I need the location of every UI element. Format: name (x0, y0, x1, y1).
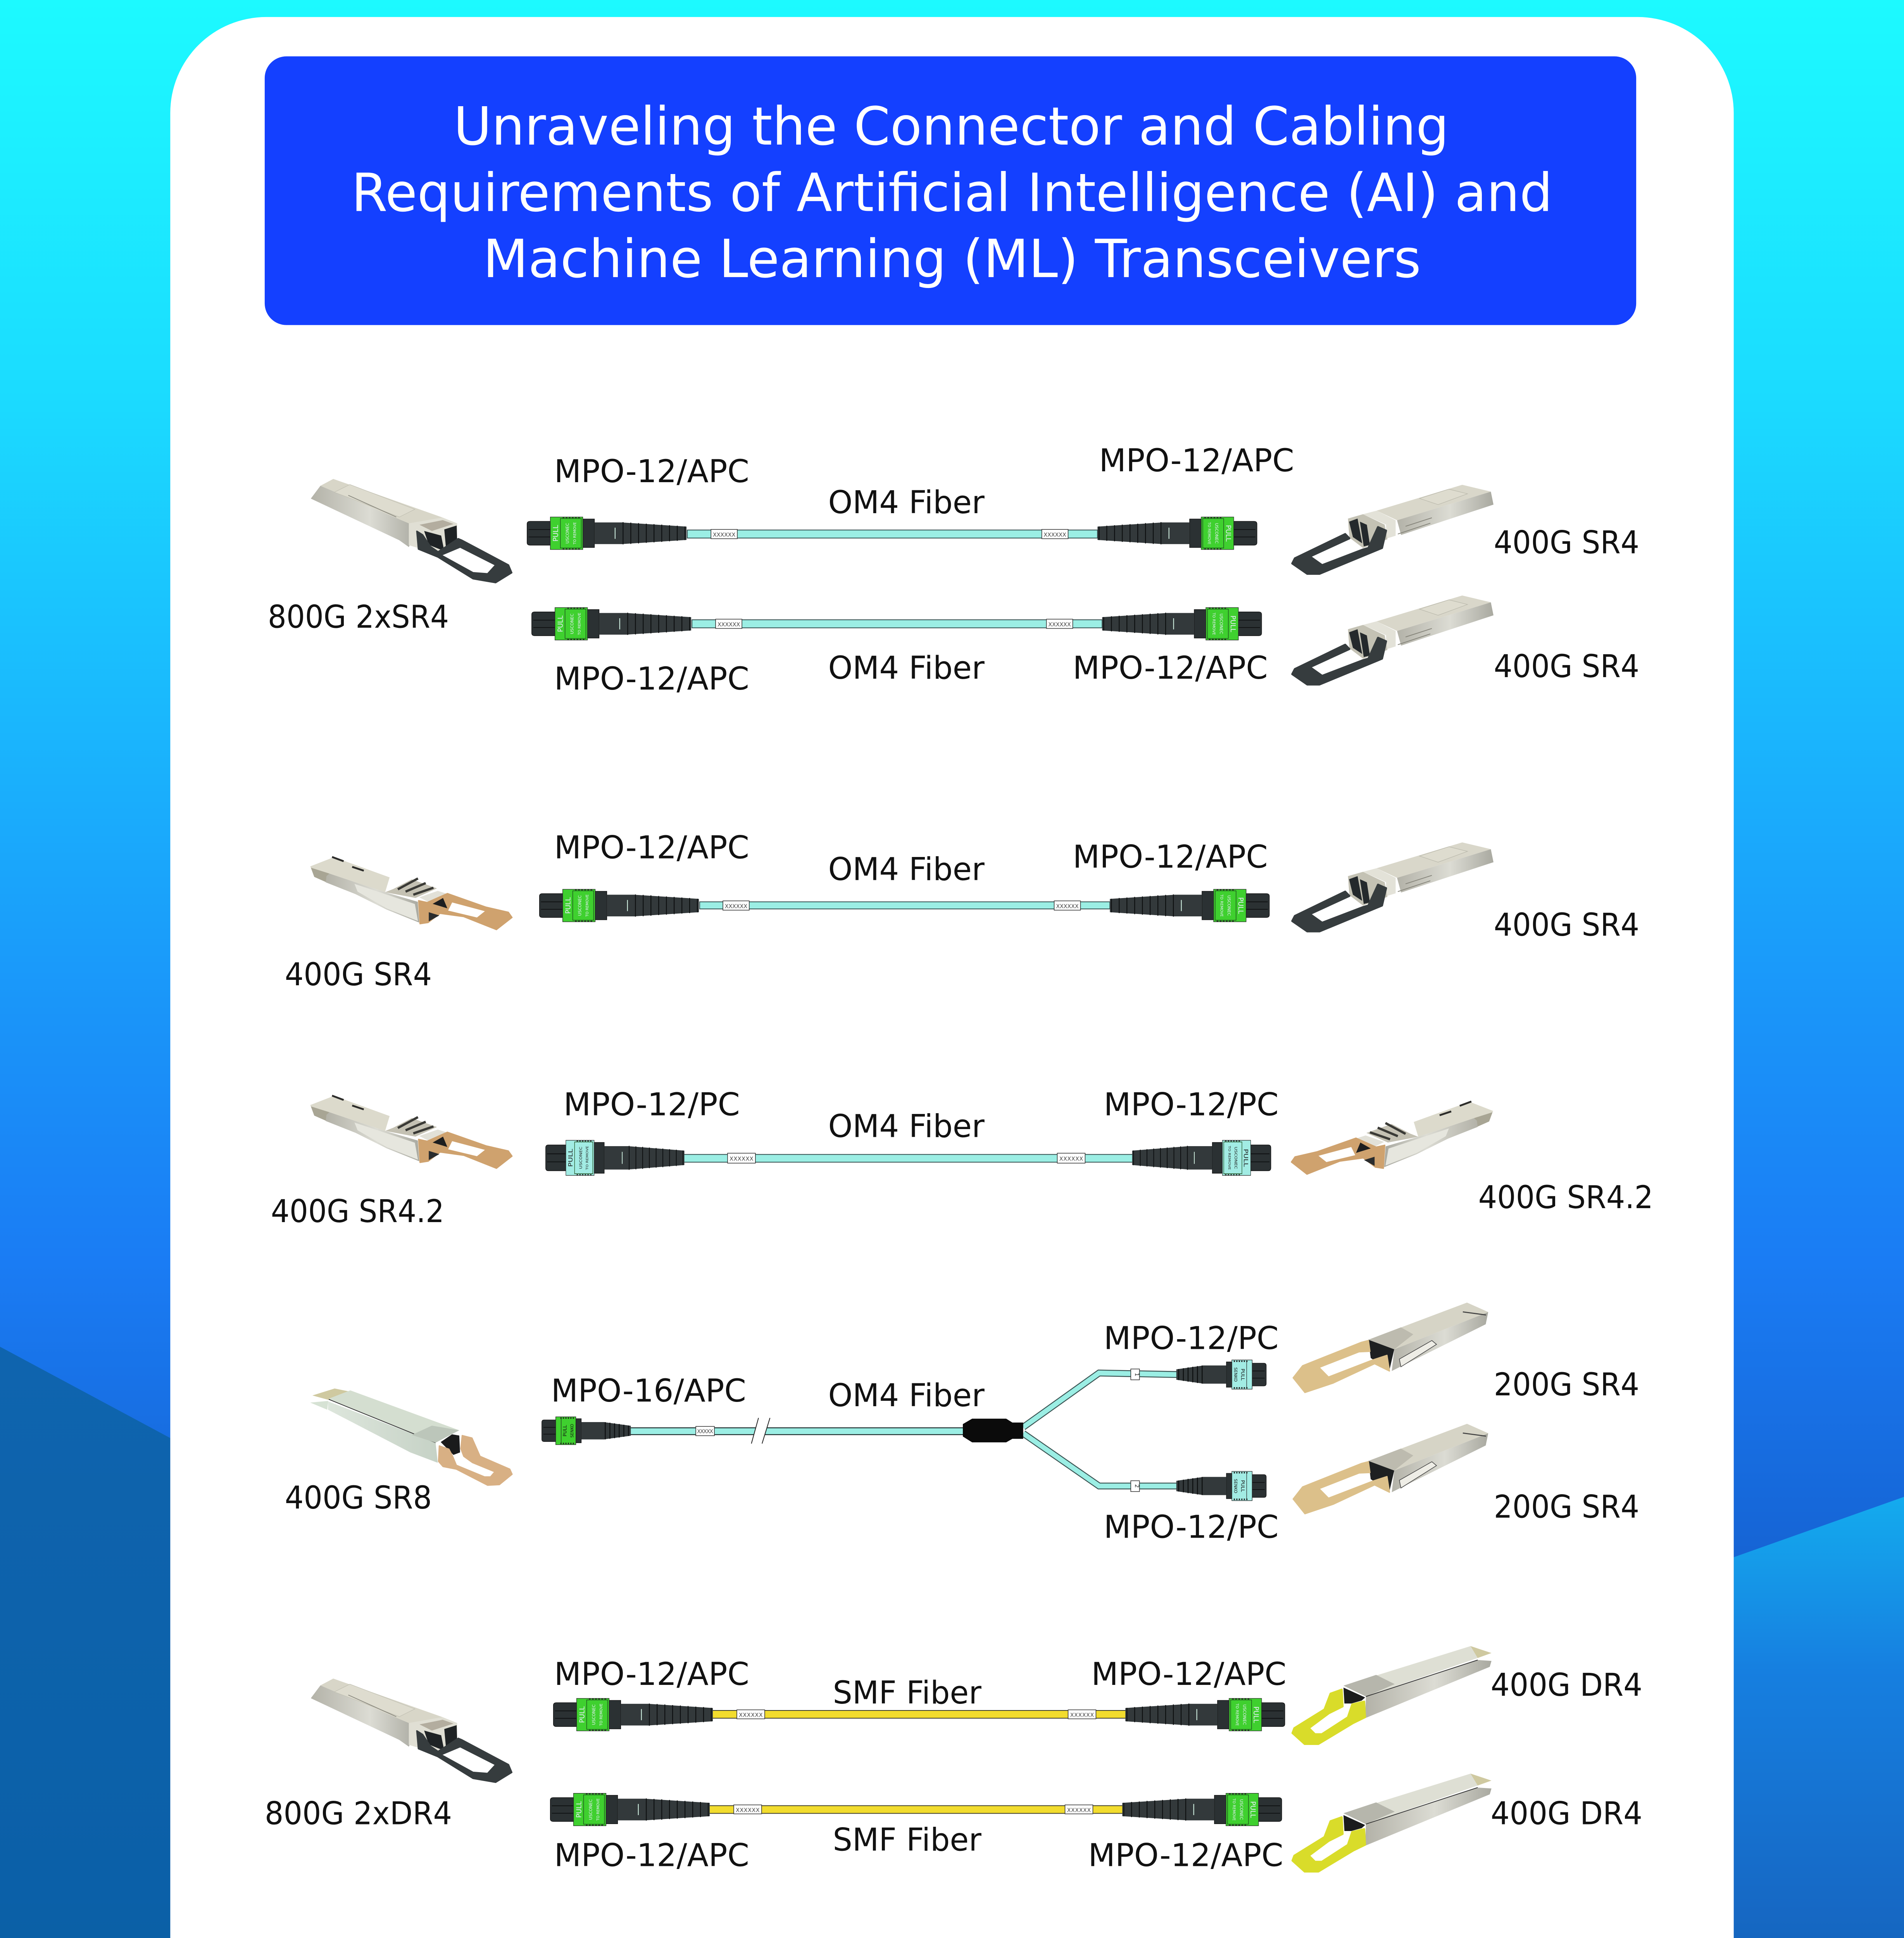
cable: upper OM4: XXXXXX (713, 532, 735, 538)
cable: lower branch (1023, 1433, 1178, 1486)
cable: OM4: XXXXXX (1056, 903, 1079, 910)
cable: lower SMF (709, 1805, 1124, 1814)
transceiver: 800G 2xSR4 (311, 479, 512, 583)
transceiver: right 400G SR4.2 (1291, 1102, 1493, 1174)
title: Unraveling the Connector and Cabling (454, 96, 1449, 157)
connector: left upper MPO-12/APC (554, 1698, 713, 1731)
connector: left MPO-12/PC (546, 1140, 685, 1176)
transceiver: upper 200G SR4 (1293, 1303, 1488, 1393)
connector: MPO-16/APC (542, 1417, 631, 1445)
label: upper 200G SR4: 200G SR4 (1494, 1366, 1639, 1403)
breakout splitter (963, 1419, 1023, 1442)
label: lower left connector: MPO-12/APC (554, 1837, 749, 1874)
transceiver: 800G 2xDR4 (311, 1679, 512, 1782)
label: upper fiber: SMF Fiber (833, 1674, 981, 1711)
label: left 400G SR4.2: 400G SR4.2 (271, 1193, 444, 1230)
title: Machine Learning (ML) Transceivers (483, 229, 1421, 290)
transceiver: left 400G SR4.2 (310, 1096, 512, 1168)
label: lower right connector: MPO-12/APC (1088, 1837, 1283, 1874)
label: left connector: MPO-12/PC (564, 1086, 740, 1123)
label: fiber: OM4 Fiber (828, 1377, 985, 1414)
label: upper 400G SR4: 400G SR4 (1494, 524, 1639, 561)
panel: title banner (265, 56, 1636, 325)
connector: right lower MPO-12/APC (1122, 1793, 1282, 1826)
label: fiber: OM4 Fiber (828, 851, 985, 888)
label: upper right connector: MPO-12/APC (1091, 1656, 1287, 1693)
panel: 400G SR8 breakout to two 200G SR4 (285, 1303, 1639, 1546)
cable: OM4 trunk (630, 1426, 964, 1436)
connector: left upper MPO-12/APC (527, 517, 686, 550)
label: left 400G SR4: 400G SR4 (285, 956, 432, 993)
label: upper right connector: MPO-12/APC (1099, 442, 1294, 479)
cable: lower OM4: XXXXXX (717, 622, 740, 628)
connector: upper MPO-12/PC (1176, 1360, 1266, 1389)
connector: left MPO-12/APC (540, 889, 699, 922)
cable: upper SMF: XXXXXX (1070, 1712, 1094, 1719)
label: fiber: OM4 Fiber (828, 1108, 985, 1145)
title: Requirements of Artificial Intelligence (AI) and (352, 162, 1552, 224)
transceiver: lower 400G SR4 (1292, 595, 1494, 685)
cable tag 1: 1 (1133, 1373, 1140, 1376)
background: lower right facet (1734, 1497, 1904, 1938)
label: right connector: MPO-12/PC (1104, 1086, 1279, 1123)
connector: right upper MPO-12/APC (1125, 1698, 1285, 1731)
label: 800G 2xSR4: 800G 2xSR4 (268, 598, 449, 635)
cable: lower SMF: XXXXXX (736, 1807, 760, 1814)
cable break mark (751, 1418, 770, 1443)
label: upper left connector: MPO-12/APC (554, 1656, 749, 1693)
label: lower 200G SR4: 200G SR4 (1494, 1489, 1639, 1526)
cable tag 1 (1131, 1369, 1140, 1380)
panel: 400G SR4 to 400G SR4 (285, 829, 1639, 993)
connector: right lower MPO-12/APC (1102, 607, 1262, 640)
label: right 400G SR4: 400G SR4 (1494, 907, 1639, 943)
transceiver: left 400G SR4 (310, 857, 512, 930)
transceiver: lower 400G DR4 (1292, 1774, 1492, 1872)
title (352, 96, 1552, 290)
cable: OM4: XXXXXX (1059, 1156, 1083, 1162)
cable tag 2: 2 (1133, 1484, 1140, 1488)
label: lower fiber: OM4 Fiber (828, 650, 985, 686)
background: lower left facet (0, 1347, 170, 1938)
cable: lower OM4: XXXXXX (1048, 622, 1071, 628)
connector: left lower MPO-12/APC (532, 607, 691, 640)
label: upper left connector: MPO-12/APC (554, 453, 749, 490)
label: right connector: MPO-12/APC (1073, 838, 1268, 875)
cable: OM4 (700, 901, 1110, 910)
transceiver: upper 400G DR4 (1292, 1646, 1492, 1744)
label: lower 400G SR4: 400G SR4 (1494, 648, 1639, 685)
transceiver: upper 400G SR4 (1292, 485, 1494, 574)
label: left connector: MPO-12/APC (554, 829, 749, 866)
label: right 400G SR4.2: 400G SR4.2 (1478, 1179, 1653, 1216)
transceiver: lower 200G SR4 (1293, 1424, 1488, 1514)
connector: lower MPO-12/PC (1176, 1471, 1266, 1501)
cable tag 2 (1131, 1481, 1140, 1491)
cable: OM4 trunk: XXXXX (697, 1429, 713, 1435)
label: lower branch connector: MPO-12/PC (1104, 1509, 1279, 1546)
cable: upper OM4: XXXXXX (1043, 532, 1066, 538)
transceiver: 400G SR8 (310, 1388, 512, 1485)
connector: right upper MPO-12/APC (1097, 517, 1257, 550)
label: 400G SR8: 400G SR8 (285, 1479, 432, 1516)
label: 800G 2xDR4: 800G 2xDR4 (265, 1795, 452, 1832)
label: upper branch connector: MPO-12/PC (1104, 1320, 1279, 1357)
cable: OM4: XXXXXX (725, 903, 747, 910)
panel: 800G 2xDR4 to two 400G DR4 (265, 1646, 1642, 1874)
cable: upper SMF (712, 1710, 1127, 1719)
label: MPO-16/APC: MPO-16/APC (551, 1372, 746, 1409)
transceiver: right 400G SR4 (1292, 842, 1494, 931)
cable: upper OM4 (687, 529, 1097, 539)
label: upper 400G DR4: 400G DR4 (1491, 1667, 1642, 1704)
panel: 800G 2xSR4 to two 400G SR4 (268, 442, 1639, 697)
label: lower left connector: MPO-12/APC (554, 660, 749, 697)
label: lower 400G DR4: 400G DR4 (1491, 1795, 1642, 1832)
cable: lower SMF: XXXXXX (1067, 1807, 1091, 1814)
connector: left lower MPO-12/APC (550, 1793, 710, 1826)
cable: upper branch (1023, 1373, 1178, 1427)
panel: 400G SR4.2 to 400G SR4.2 (271, 1086, 1653, 1230)
connector: right MPO-12/APC (1110, 889, 1269, 922)
label: lower right connector: MPO-12/APC (1073, 650, 1268, 686)
label: lower fiber: SMF Fiber (833, 1821, 981, 1858)
cable: lower OM4 (692, 619, 1102, 628)
cable: upper SMF: XXXXXX (739, 1712, 763, 1719)
cable: OM4: XXXXXX (730, 1156, 754, 1162)
label: upper fiber: OM4 Fiber (828, 484, 985, 521)
connector: right MPO-12/PC (1132, 1140, 1271, 1176)
cable: OM4 (683, 1153, 1133, 1163)
